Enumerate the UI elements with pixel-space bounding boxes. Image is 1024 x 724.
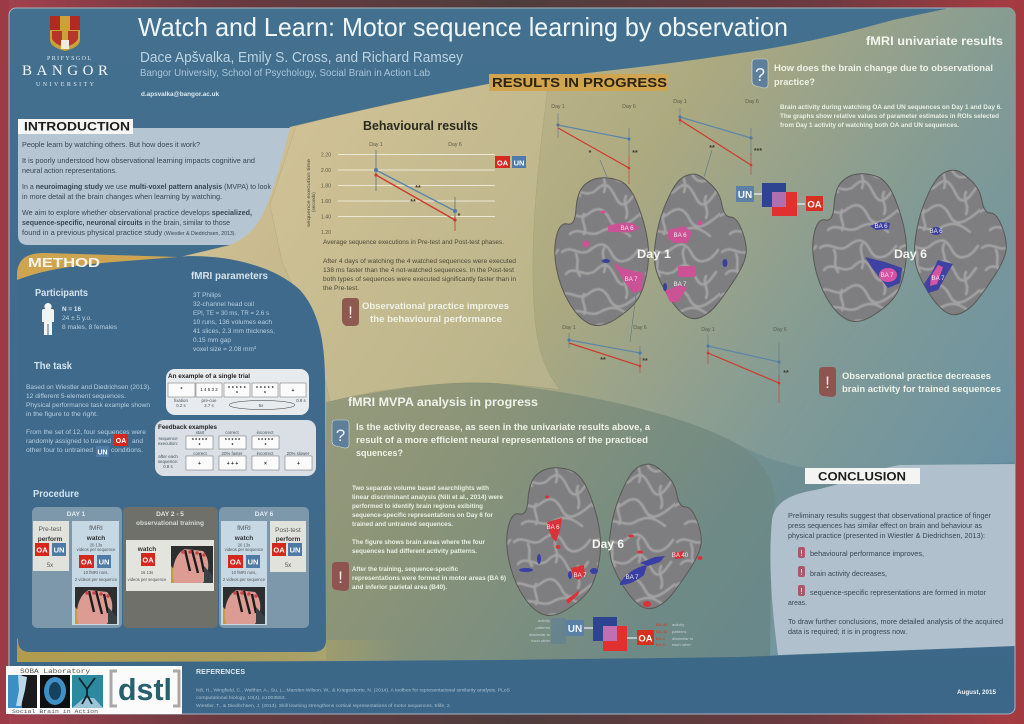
logo: Bangor University: BANGOR — [22, 63, 108, 79]
the task: Based on Wiestler and Diedrichsen (2013). — [26, 384, 151, 391]
participants: 24 ± 5 y.o. — [62, 315, 92, 322]
introduction text: sequence-specific, neuronal circuits in the brain, similar to those — [22, 218, 230, 227]
figure: feedback examples: * * * * * — [258, 438, 273, 444]
icon: exclamation: ! — [338, 568, 343, 587]
procedure: day 1: Pre-test — [39, 526, 62, 533]
MVPA heading: fMRI MVPA analysis in progress — [348, 397, 538, 409]
line chart: lower right ROI: Day 6 — [773, 327, 787, 333]
references: Wiestler, T., & Diedrichsen, J. (2013). Skill learning strengthens cortical representations of motor sequences. Elife, 2. — [196, 703, 451, 708]
figure: example of a single trial — [166, 369, 309, 415]
logo: Bangor University: PRIFYSGOL — [47, 56, 91, 62]
fMRI parameters: 32-channel head coil — [193, 301, 254, 308]
conclusion point 2 — [798, 566, 887, 578]
procedure: day 6: videos per sequence — [225, 547, 264, 552]
the task — [26, 361, 151, 457]
icon: exclamation: ! — [348, 303, 353, 322]
introduction text: In a neuroimaging study we use multi-voxel pattern analysis (MVPA) to look — [22, 182, 271, 191]
brain: day 1: BA 7 — [624, 276, 638, 283]
panel: method — [17, 253, 326, 652]
procedure: day 1: perform — [38, 536, 62, 543]
figure: example of a single trial: 6x — [259, 403, 264, 408]
legend: MVPA UN and OA accuracy: activity — [538, 618, 550, 623]
conclusion point 2: ! — [800, 568, 803, 577]
line chart: execution time: (seconds) — [311, 192, 316, 212]
question callout: result of a more efficient neural representations of the practiced — [356, 435, 648, 446]
question callout: How does the brain change due to observational — [774, 63, 993, 74]
figure: feedback examples: start — [196, 430, 205, 435]
title: Watch and Learn: Motor sequence learning by observation — [138, 12, 788, 42]
icon: person — [42, 303, 54, 335]
line chart: execution time: 1.80 — [321, 184, 331, 190]
conclusion closing text — [788, 617, 1003, 636]
procedure: day 6: UN — [290, 546, 300, 554]
fMRI parameters — [191, 271, 275, 353]
behavioural caption and text: After 4 days of watching the 4 watched sequences were executed — [323, 258, 516, 265]
the task: 12 different 5-element sequences. — [26, 393, 126, 400]
panel: conclusion — [770, 464, 1015, 655]
logo: Bangor University: UNIVERSITY — [36, 82, 95, 88]
procedure: day 1: 2 videos per sequence — [75, 577, 118, 582]
brain: day 6: Day 6 — [894, 247, 927, 261]
fMRI parameters: voxel size = 2.08 mm³ — [193, 346, 257, 353]
conclusion point 3: areas. — [788, 598, 807, 607]
procedure: day 1: UN — [99, 558, 109, 566]
figure: example of a single trial: * — [181, 387, 183, 393]
line chart: upper right ROI: Day 6 — [745, 99, 759, 105]
conclusion point 3: ! — [800, 587, 803, 596]
the task: other four to untrained — [26, 447, 93, 454]
figure: feedback examples: sequence — [158, 436, 178, 441]
line chart: upper right ROI: Day 1 — [673, 99, 687, 105]
figure: example of a single trial: 0.2 s — [176, 403, 187, 408]
legend: MVPA UN and OA accuracy: BA 40 — [656, 622, 668, 627]
procedure: day 1: 10 fMRI runs, — [83, 570, 109, 575]
line chart: lower left ROI: Day 1 — [562, 325, 576, 331]
behavioural caption and text — [323, 239, 516, 292]
callout: behavioural finding: the behavioural performance — [370, 314, 502, 325]
conclusion closing text: data is required; it is in progress now. — [788, 627, 907, 636]
MVPA description: performed to identify brain regions exibiting — [352, 504, 483, 510]
line chart: execution time: 2.20 — [321, 152, 331, 158]
callout: univariate finding: brain activity for trained sequences — [842, 384, 1001, 395]
procedure: day 1: fMRI — [89, 525, 103, 532]
legend: MVPA UN and OA accuracy: dissimilar to — [672, 636, 694, 641]
results in progress banner: RESULTS IN PROGRESS — [492, 75, 667, 90]
legend: UN and OA overlap: UN — [738, 190, 752, 201]
figure: feedback examples: 20% faster — [222, 451, 243, 456]
question callout: practice? — [774, 77, 815, 88]
procedure: day 6: 2 videos per sequence — [223, 577, 266, 582]
panel: fMRI univariate results — [551, 36, 1006, 403]
the task: The task — [34, 361, 72, 372]
the task: From the set of 12, four sequences were — [26, 429, 146, 436]
brain: MVPA day 6: BA 7 — [625, 574, 639, 581]
MVPA description: sequence-specific representations on Day 6 for — [352, 513, 494, 519]
line chart: execution time: ** — [410, 199, 416, 206]
line chart: execution time: 2.00 — [321, 168, 331, 174]
MVPA description: trained and untrained sequences. — [352, 522, 453, 528]
figure: example of a single trial: + — [292, 388, 295, 394]
icon: exclamation — [342, 298, 359, 326]
conclusion closing text: To draw further conclusions, more detailed analysis of the acquired — [788, 617, 1003, 626]
figure: feedback examples: execution: — [158, 441, 178, 446]
figure: feedback examples: correct — [225, 430, 239, 435]
brain: MVPA day 6: BA 40 — [672, 552, 689, 559]
introduction heading — [18, 119, 133, 134]
procedure: day 6: OA — [273, 546, 285, 554]
authors: Dace Apšvalka, Emily S. Cross, and Richard Ramsey — [140, 49, 463, 66]
references: Nili, H., Wingfield, C., Walther, A., Su, L., Marslen-Wilson, W., & Kriegeskorte, N. (2014). A toolbox for representational similarity analysis. PLoS — [196, 688, 510, 692]
line chart: upper left ROI: * — [589, 150, 592, 157]
brain: day 1: BA 7 — [673, 281, 687, 288]
references — [196, 669, 510, 708]
line chart: upper right ROI — [673, 99, 762, 177]
line chart: lower left ROI: ** — [600, 357, 606, 364]
logos: SOBA Laboratory and dstl: SOBA Laboratory — [20, 668, 90, 675]
line chart: lower right ROI: Day 1 — [701, 327, 715, 333]
line chart: upper right ROI: *** — [754, 148, 762, 155]
question callout — [752, 59, 993, 88]
figure: feedback examples: sequence: — [158, 459, 178, 464]
line chart: execution time — [306, 142, 495, 236]
legend: MVPA UN and OA accuracy: patterns — [536, 625, 550, 630]
procedure: day 1: 20 13s — [90, 542, 102, 548]
figure: feedback examples: incorrect — [257, 430, 274, 435]
univariate heading: fMRI univariate results — [866, 36, 1003, 48]
introduction text: in more detail at the brain changes when learning by watching. — [22, 192, 222, 201]
question callout — [332, 420, 651, 459]
line chart: upper right ROI: ** — [709, 145, 715, 152]
participants: 8 males, 8 females — [62, 324, 118, 331]
bottom gold strip — [17, 640, 400, 662]
figure: feedback examples: * — [265, 443, 267, 449]
the task: OA — [116, 438, 126, 445]
conclusion point 2: brain activity decreases, — [810, 569, 887, 578]
logos: SOBA Laboratory and dstl — [6, 666, 182, 715]
legend: MVPA UN and OA accuracy: each other — [531, 638, 551, 643]
MVPA description: sequences had different activity patterns. — [352, 549, 477, 555]
the task: in the figure to the right. — [26, 411, 98, 418]
line chart: lower right ROI: ** — [783, 370, 789, 377]
MVPA description — [352, 486, 504, 555]
figure: feedback examples: correct — [193, 451, 207, 456]
callout: behavioural finding — [342, 298, 509, 326]
MVPA description: linear discriminant analysis (Nili et al., 2014) were — [352, 495, 504, 501]
figure: feedback examples — [155, 420, 316, 476]
line chart: upper left ROI: Day 1 — [551, 104, 565, 110]
method heading ribbon: METHOD — [28, 256, 100, 270]
behavioural caption and text: Average sequence executions in Pre-test and Post-test phases. — [323, 239, 504, 246]
conclusion intro text — [788, 511, 992, 540]
affiliation: Bangor University, School of Psychology, Social Brain in Action Lab — [140, 67, 430, 79]
figure: example of a single trial: 0.8 s — [296, 398, 307, 403]
procedure: day 1: 5x — [47, 563, 53, 569]
date: August, 2015 — [957, 689, 996, 696]
panel: behavioural results — [306, 119, 526, 326]
introduction text: found in a previous physical practice study (Wiestler & Diedrichsen, 2013). — [22, 228, 236, 237]
legend: MVPA UN and OA accuracy: dissimilar to — [529, 632, 551, 637]
legend: MVPA UN and OA accuracy — [529, 617, 694, 651]
conclusion heading — [805, 468, 920, 484]
procedure: day 2-5: 16 13s — [141, 570, 153, 575]
figure: feedback examples: after each — [158, 454, 178, 459]
legend: MVPA UN and OA accuracy: BA 6 — [656, 642, 666, 647]
legend: MVPA UN and OA accuracy: BA 40 — [656, 629, 668, 634]
figure: feedback examples: 20% slower — [287, 451, 310, 456]
fMRI parameters: fMRI parameters — [191, 271, 268, 282]
introduction text: People learn by watching others. But how does it work? — [22, 140, 200, 149]
conclusion point 3 — [788, 585, 987, 607]
behavioural heading: Behavioural results — [363, 119, 478, 133]
brain: day 1: Day 1 — [637, 247, 671, 261]
callout: univariate finding — [819, 367, 1001, 397]
callout: MVPA finding: and inferior parietal area (B40). — [352, 585, 447, 591]
figure: feedback examples: incorrect — [257, 451, 274, 456]
icon: question mark — [752, 59, 768, 88]
univariate description: The graphs show relative values of parameter estimates in ROIs selected — [780, 114, 999, 120]
logos: SOBA Laboratory and dstl: Social Brain in Action — [12, 708, 98, 715]
procedure: day 1: UN — [54, 546, 64, 554]
legend: MVPA UN and OA accuracy: each other — [672, 642, 692, 647]
legend: OA and UN: OA — [497, 158, 509, 168]
line chart: execution time: Day 1 — [369, 142, 383, 148]
icon: question mark: ? — [755, 65, 765, 85]
figure: feedback examples: Feedback examples — [158, 425, 218, 431]
figure: feedback examples: 0.8 s — [163, 464, 174, 469]
callout: MVPA finding: After the training, sequence-specific — [352, 567, 459, 573]
procedure: day 2-5 — [123, 507, 218, 628]
line chart: upper left ROI: ** — [632, 150, 638, 157]
line chart: execution time: ** — [415, 185, 421, 192]
behavioural caption and text: both types of sequences were executed significantly faster than in — [323, 276, 516, 283]
procedure: day 1 — [32, 507, 122, 628]
logo: Bangor University — [22, 16, 108, 88]
fMRI parameters: 0.15 mm gap — [193, 337, 231, 344]
callout: univariate finding: Observational practice decreases — [842, 371, 991, 382]
callout: behavioural finding: Observational practice improves — [362, 301, 509, 312]
MVPA description: The figure shows brain areas where the four — [352, 540, 486, 546]
brain: MVPA day 6: BA 7 — [573, 572, 587, 579]
method panel background — [18, 256, 326, 652]
figure: example of a single trial: An example of a single trial — [168, 374, 250, 380]
participants: Participants — [35, 288, 88, 299]
panel: introduction — [18, 119, 290, 245]
line chart: execution time: 1.40 — [321, 214, 331, 220]
figure: example of a single trial: pre-cue — [202, 398, 217, 403]
figure: feedback examples: + — [297, 461, 300, 467]
brain: day 1: BA 6 — [620, 225, 634, 232]
line chart: execution time: * — [458, 213, 461, 220]
the task: conditions. — [111, 447, 143, 454]
legend: MVPA UN and OA accuracy: UN — [568, 624, 582, 635]
introduction text: We aim to explore whether observational practice develops specialized, — [22, 208, 252, 217]
participants: N = 16 — [62, 306, 81, 313]
procedure heading: Procedure — [33, 489, 79, 500]
MVPA description: Two separate volume based searchlights with — [352, 486, 489, 492]
brain: day 1: BA 6 — [673, 232, 687, 239]
line chart: upper left ROI: Day 6 — [622, 104, 636, 110]
figure: feedback examples: * — [232, 443, 234, 449]
procedure: day 6: watch — [234, 535, 253, 542]
conclusion point 1: ! — [800, 549, 803, 558]
line chart: execution time: 1.60 — [321, 199, 331, 205]
icon: question mark — [332, 420, 349, 448]
procedure: day 6 — [219, 507, 309, 628]
figure: example of a single trial: * * * * * — [256, 386, 274, 392]
brain: day 6: BA 6 — [874, 223, 888, 230]
figure: example of a single trial: 1 4 5 3 2 — [200, 387, 218, 392]
fMRI parameters: 10 runs, 136 volumes each — [193, 319, 272, 326]
icon: exclamation — [332, 562, 349, 591]
introduction text: It is poorly understood how observational learning impacts cognitive and — [22, 156, 255, 165]
procedure: day 2-5: videos per sequence — [128, 577, 167, 582]
brain: day 6 — [813, 170, 1006, 322]
procedure: day 6: fMRI — [237, 525, 251, 532]
introduction text — [22, 140, 271, 237]
the task: randomly assigned to trained — [26, 438, 111, 445]
icon: question mark: ? — [336, 426, 345, 445]
univariate description — [780, 105, 1002, 129]
brain: MVPA day 6: Day 6 — [592, 537, 624, 551]
procedure: day 6: UN — [248, 558, 258, 566]
figure: example of a single trial: * — [236, 391, 238, 397]
conclusion heading: CONCLUSION — [818, 472, 906, 484]
procedure: day 1: OA — [81, 558, 93, 566]
fMRI parameters: 41 slices, 2.3 mm thickness, — [193, 328, 275, 335]
procedure: day 6: 10 fMRI runs, — [231, 570, 257, 575]
procedure: day 6: perform — [276, 536, 300, 543]
brain: day 6: BA 7 — [931, 275, 945, 282]
univariate upper right tone — [730, 440, 1015, 656]
conclusion point 1: behavioural performance improves, — [810, 549, 924, 558]
behavioural caption and text: 138 ms faster than the 4 not-watched sequences. In the Post-test — [323, 267, 514, 274]
procedure: day 1: videos per sequence — [77, 547, 116, 552]
line chart: execution time: sequence execution time — [306, 158, 311, 227]
procedure: day 1: OA — [36, 546, 48, 554]
figure: example of a single trial: * — [264, 391, 266, 397]
brain: day 6: BA 7 — [880, 272, 894, 279]
question callout: Is the activity decrease, as seen in the univariate results above, a — [356, 422, 651, 433]
line chart: upper left ROI — [551, 104, 638, 184]
line chart: lower left ROI: Day 6 — [633, 325, 647, 331]
procedure: day 2-5: observational training — [136, 520, 204, 527]
univariate description: from Day 1 activity of watching both OA and UN sequences. — [780, 123, 959, 129]
legend: OA and UN: UN — [514, 158, 524, 168]
brain: MVPA day 6 — [507, 464, 702, 616]
references: REFERENCES — [196, 669, 245, 676]
procedure: day 2-5: DAY 2 - 5 — [156, 511, 184, 518]
procedure: day 6: Post-test — [275, 527, 301, 534]
question callout: squences? — [356, 448, 403, 459]
procedure: day 6: 20 13s — [238, 542, 250, 548]
callout: MVPA finding — [332, 562, 506, 591]
legend: MVPA UN and OA accuracy: OA — [638, 634, 653, 644]
legend: MVPA UN and OA accuracy: patterns — [672, 629, 686, 634]
figure: feedback examples: * — [199, 443, 201, 449]
conclusion point 3: sequence-specific representations are formed in motor — [810, 588, 987, 597]
figure: feedback examples: * * * * * — [192, 438, 207, 444]
line chart: execution time: Day 6 — [448, 142, 462, 148]
behavioural caption and text: the Pre-test. — [323, 285, 359, 292]
icon: exclamation — [819, 367, 836, 397]
legend: UN and OA overlap — [736, 183, 823, 216]
figure: example of a single trial: fixation — [174, 398, 189, 403]
line chart: lower right ROI — [701, 327, 789, 403]
icon: exclamation: ! — [825, 373, 830, 392]
procedure: day 6: DAY 6 — [255, 511, 274, 518]
icon: runner image — [8, 675, 37, 708]
conclusion intro text: physical practice (presented in Wiestler & Diedrichsen, 2013): — [788, 531, 985, 540]
conclusion intro text: Preliminary results suggest that observational practice of finger — [788, 511, 992, 520]
line chart: lower left ROI — [562, 295, 648, 373]
the task: and — [132, 438, 143, 445]
line chart: execution time: 1.20 — [321, 230, 331, 236]
figure: feedback examples: * * * * * — [225, 438, 240, 444]
method heading ribbon — [17, 253, 178, 280]
icon: brain scan image — [40, 675, 70, 708]
procedure: day 2-5: watch — [137, 546, 156, 553]
fMRI parameters: EPI, TE = 30 ms, TR = 2.6 s — [193, 310, 270, 317]
figure: feedback examples: + + + — [227, 461, 238, 467]
figure: example of a single trial: * * * * * — [228, 386, 246, 392]
references: computational biology, 10(4), e1003553. — [196, 695, 286, 700]
icon: figure on mountain image — [72, 675, 103, 708]
the task: UN — [97, 450, 108, 456]
univariate description: Brain activity during watching OA and UN sequences on Day 1 and Day 6. — [780, 105, 1002, 111]
line chart: lower left ROI: ** — [642, 358, 648, 365]
logo: dstl: dstl — [118, 672, 172, 707]
introduction text: neural action representations. — [22, 166, 117, 175]
legend: UN and OA overlap: OA — [807, 200, 822, 210]
panel: fMRI MVPA analysis — [332, 397, 702, 651]
brain: day 6: BA 6 — [929, 228, 943, 235]
contact email: d.apsvalka@bangor.ac.uk — [141, 91, 219, 98]
procedure: day 6: 5x — [285, 563, 291, 569]
introduction heading: INTRODUCTION — [24, 122, 130, 134]
conclusion intro text: press sequences has similar effect on brain and behaviour as — [788, 521, 982, 530]
figure: example of a single trial: 2.7 s — [204, 403, 215, 408]
figure: feedback examples: × — [264, 461, 267, 467]
fMRI parameters: 3T Philips — [193, 292, 222, 299]
brain: MVPA day 6: BA 6 — [546, 524, 560, 531]
behavioural results light panel — [270, 78, 560, 402]
legend: MVPA UN and OA accuracy: activity — [672, 622, 684, 627]
legend: OA and UN — [495, 156, 526, 168]
icon: crest shield — [50, 16, 80, 51]
procedure: day 6: OA — [230, 558, 242, 566]
callout: MVPA finding: representations were formed in motor areas (BA 6) — [352, 576, 506, 582]
the task: Physical performance task example shown — [26, 402, 150, 409]
participants — [35, 288, 118, 335]
procedure: day 2-5: OA — [142, 556, 154, 564]
MVPA analysis darker background — [326, 382, 775, 660]
procedure: day 1: watch — [86, 535, 105, 542]
procedure: day 1: DAY 1 — [67, 511, 86, 518]
brain: day 1 — [555, 174, 746, 326]
figure: feedback examples: + — [198, 461, 201, 467]
legend: MVPA UN and OA accuracy: BA 6 — [656, 636, 666, 641]
